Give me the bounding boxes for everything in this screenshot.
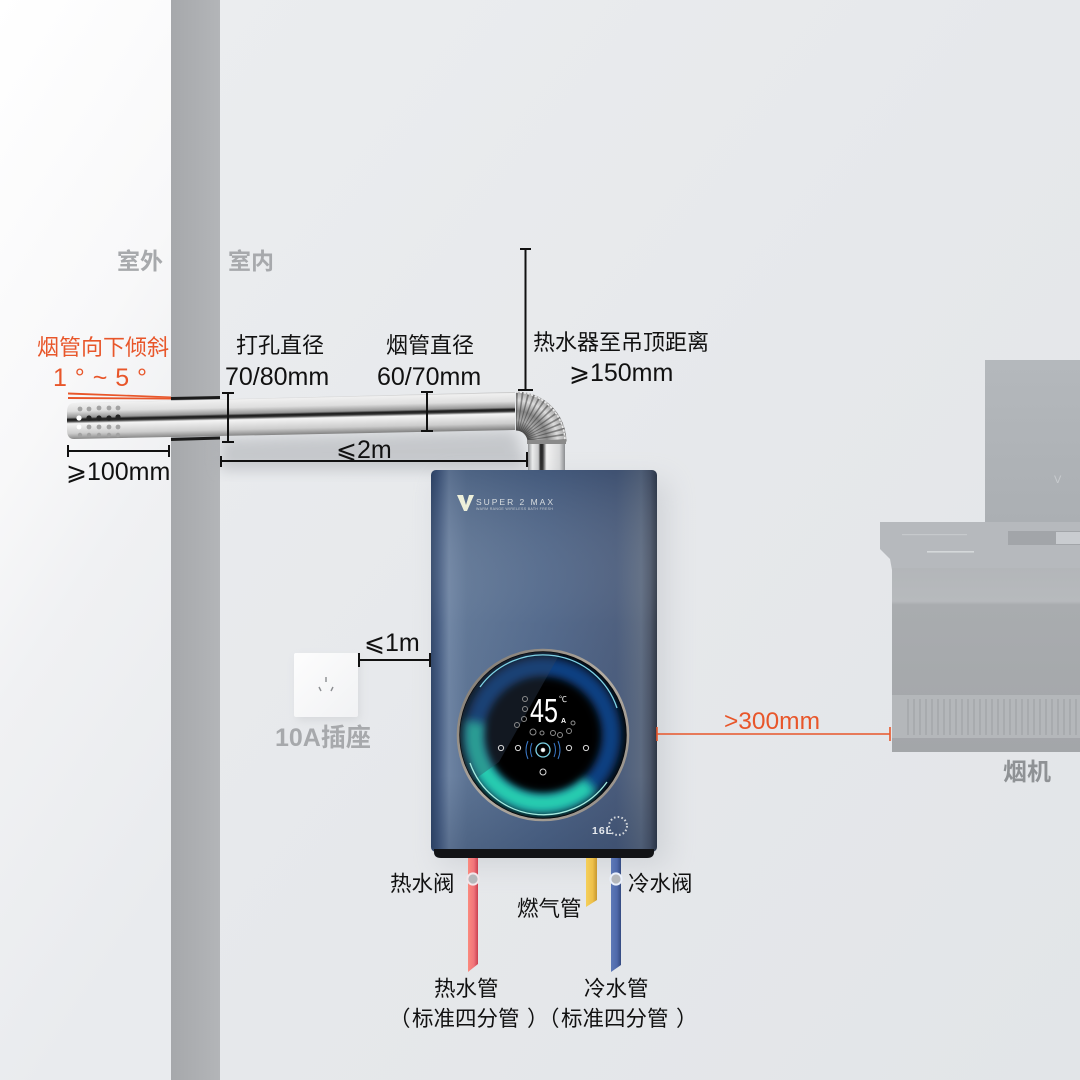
range hood bbox=[880, 360, 1080, 752]
cold water pipe bbox=[611, 856, 621, 972]
label: cold water valve: 冷水阀 bbox=[628, 872, 693, 896]
callout: flue slope: 1 ° ~ 5 ° bbox=[53, 364, 147, 392]
label: cold water pipe: （ bbox=[538, 1007, 560, 1031]
label: hot water pipe: ） bbox=[527, 1007, 549, 1031]
dimension: socket distance bbox=[359, 629, 430, 667]
label: hot water pipe: 热水管 bbox=[434, 977, 499, 1001]
hot water pipe bbox=[468, 856, 478, 972]
dimension: ceiling distance bbox=[518, 249, 709, 390]
control dial: ℃ bbox=[559, 695, 567, 704]
flue vertical section bbox=[528, 444, 565, 472]
hot water valve bbox=[467, 873, 479, 885]
label: hot water pipe: 标准四分管 bbox=[412, 1007, 520, 1031]
water heater bbox=[431, 470, 657, 858]
dimension: socket distance: ⩽1m bbox=[364, 629, 420, 657]
brand logo: SUPER 2 MAX bbox=[476, 497, 553, 507]
socket bbox=[294, 653, 359, 720]
dimension: horizontal run bbox=[221, 436, 527, 467]
brand logo bbox=[457, 495, 553, 511]
flue elbow bbox=[516, 392, 566, 444]
pipe shadow bbox=[220, 430, 528, 470]
label: hot water pipe bbox=[389, 977, 549, 1031]
dimension: flue diameter: 60/70mm bbox=[377, 363, 481, 391]
cold water valve bbox=[610, 873, 622, 885]
dimension: hole diameter: 打孔直径 bbox=[236, 333, 324, 358]
temperature readout: 45 bbox=[530, 692, 558, 729]
wall cross-section bbox=[171, 0, 220, 1080]
heater shadow bbox=[440, 480, 668, 865]
label: gas pipe: 燃气管 bbox=[517, 897, 582, 921]
dimension: hole diameter: 70/80mm bbox=[225, 363, 329, 391]
dimension: flue diameter: 烟管直径 bbox=[386, 333, 474, 358]
dimension: ceiling distance: 热水器至吊顶距离 bbox=[533, 330, 709, 355]
label: cold water pipe bbox=[538, 977, 698, 1031]
label: hot water valve: 热水阀 bbox=[390, 872, 455, 896]
callout: flue slope bbox=[37, 335, 171, 400]
touch controls bbox=[498, 741, 589, 775]
dimension: ceiling distance: ⩾150mm bbox=[569, 359, 673, 387]
control dial bbox=[458, 650, 628, 820]
label: cold water pipe: 标准四分管 bbox=[561, 1007, 669, 1031]
callout: flue slope: 烟管向下倾斜 bbox=[37, 335, 169, 360]
perforations on pipe end bbox=[76, 406, 121, 437]
label: hot water pipe: （ bbox=[389, 1007, 411, 1031]
pipes below heater bbox=[467, 856, 622, 972]
capacity badge bbox=[592, 817, 627, 837]
dimension: horizontal run: ⩽2m bbox=[336, 436, 392, 464]
label: socket: 10A插座 bbox=[275, 724, 371, 752]
capacity badge: 16L bbox=[592, 825, 613, 837]
label: outdoor: 室外 bbox=[117, 248, 163, 274]
dimension: outdoor protrusion bbox=[66, 445, 170, 486]
brand logo: WARM RANGE WIRELESS BATH FRESH bbox=[476, 507, 553, 511]
label: range hood: 烟机 bbox=[1003, 759, 1051, 786]
dimension: outdoor protrusion: ⩾100mm bbox=[66, 458, 170, 486]
dimension: flue diameter bbox=[377, 333, 481, 431]
gas pipe bbox=[586, 856, 597, 907]
label: indoor: 室内 bbox=[228, 248, 274, 274]
label: cold water pipe: ） bbox=[676, 1007, 698, 1031]
readout indicator dots bbox=[514, 696, 575, 738]
control dial: A bbox=[561, 718, 566, 725]
dimension: hood clearance bbox=[657, 708, 890, 741]
label: cold water pipe: 冷水管 bbox=[584, 977, 649, 1001]
dimension: hole diameter bbox=[222, 333, 329, 442]
flue pipe bbox=[67, 392, 515, 440]
range hood: V bbox=[1054, 474, 1062, 486]
dimension: hood clearance: >300mm bbox=[724, 708, 820, 735]
